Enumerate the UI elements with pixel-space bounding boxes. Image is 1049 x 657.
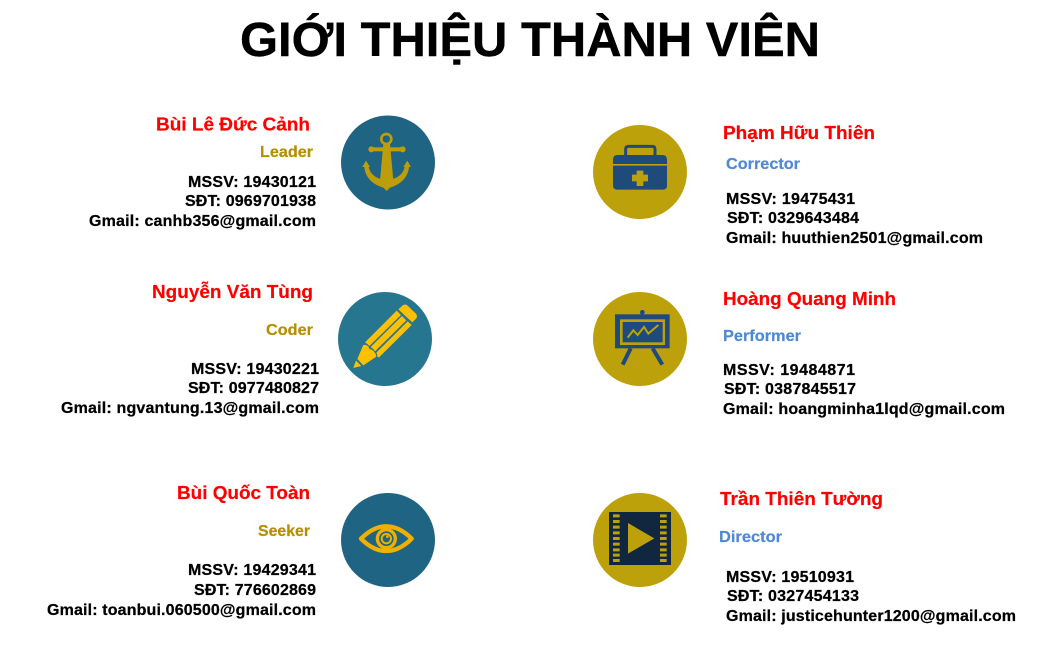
contact details: SĐT: 0969701938 [185,193,316,210]
contact details: MSSV: 19430121 [188,174,316,191]
contact details: MSSV: 19430221 [191,361,319,378]
contact details: MSSV: 19429341 [188,562,316,579]
name: Phạm Hữu Thiên [723,122,875,143]
role: Director [719,529,782,546]
icon: eye [341,493,435,587]
contact details: MSSV: 19475431 [726,191,855,208]
panel: Trần Thiên Tường [593,488,1016,625]
contact details: SĐT: 0329643484 [727,210,859,227]
icon: presentation easel [593,292,687,386]
icon: film strip with play button [593,493,687,587]
name: Bùi Lê Đức Cảnh [156,114,310,134]
contact details: Gmail: justicehunter1200@gmail.com [726,608,1016,625]
contact details [726,569,1016,625]
name: Bùi Quốc Toàn [177,482,310,503]
contact details: SĐT: 776602869 [194,582,316,599]
role: Corrector [726,156,800,173]
contact details: Gmail: canhb356@gmail.com [89,213,316,230]
panel: Phạm Hữu Thiên [593,122,983,247]
name: Hoàng Quang Minh [723,288,896,309]
contact details [47,562,316,619]
contact details: SĐT: 0977480827 [188,380,319,397]
panel: Bùi Lê Đức Cảnh [89,114,435,230]
contact details: SĐT: 0327454133 [727,588,859,605]
panel: Hoàng Quang Minh [593,288,1005,418]
panel: Nguyễn Văn Tùng [61,281,432,417]
role: Coder [266,322,313,339]
icon: first-aid kit [593,125,687,219]
role: Performer [723,328,801,345]
contact details: MSSV: 19484871 [723,362,855,379]
role: Leader [260,144,313,161]
name: Nguyễn Văn Tùng [152,281,313,302]
role: Seeker [258,523,310,540]
contact details [723,362,1005,418]
icon: pencil [338,292,432,386]
contact details: Gmail: hoangminha1lqd@gmail.com [723,401,1005,418]
title: GIỚI THIỆU THÀNH VIÊN [240,12,820,67]
contact details: SĐT: 0387845517 [724,381,856,398]
icon: anchor [341,116,435,210]
contact details: Gmail: toanbui.060500@gmail.com [47,602,316,619]
name: Trần Thiên Tường [720,488,883,509]
contact details: Gmail: huuthien2501@gmail.com [726,230,983,247]
panel: Bùi Quốc Toàn [47,482,435,619]
contact details: MSSV: 19510931 [726,569,854,586]
contact details [726,191,983,247]
contact details: Gmail: ngvantung.13@gmail.com [61,400,319,417]
contact details [61,361,319,417]
contact details [89,174,316,230]
